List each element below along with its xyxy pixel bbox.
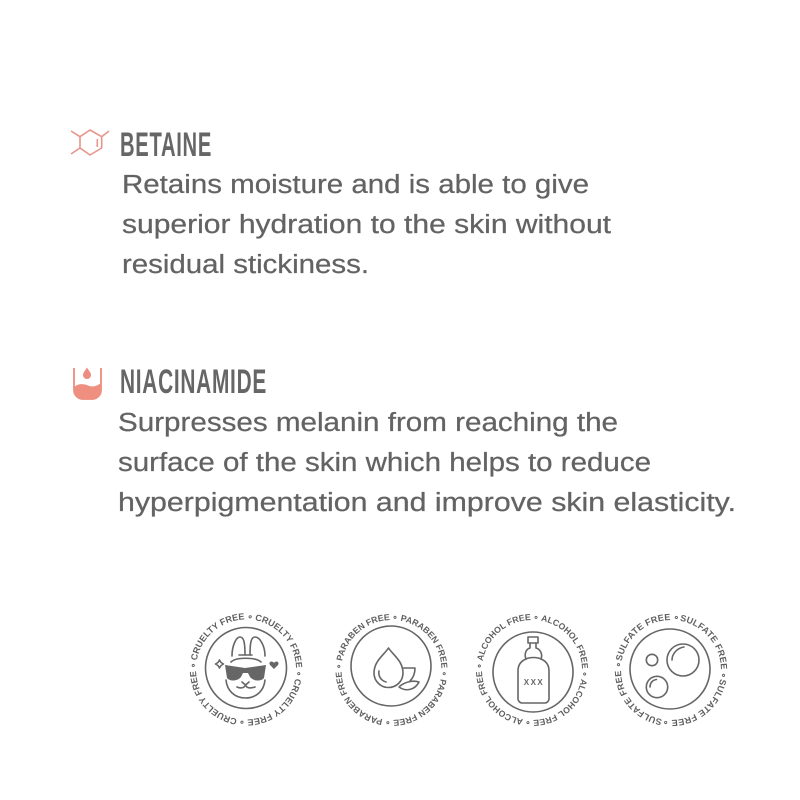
text block: betaine description (122, 171, 611, 279)
badge: paraben free (336, 614, 448, 726)
badge: paraben free: PARABEN FREE ∘ (386, 679, 446, 726)
badge: cruelty free: CRUELTY FREE ∘ (240, 679, 301, 726)
icon: bottle: XXX (524, 678, 544, 687)
text block: betaine description: residual stickiness. (122, 251, 369, 279)
badge: paraben free: PARABEN FREE ∘ (336, 664, 382, 725)
badge: cruelty free: CRUELTY FREE ∘ (256, 614, 302, 676)
heading: betaine: BETAINE (120, 126, 212, 164)
badge: sulfate free: SULFATE FREE ∘ (664, 679, 726, 726)
icon: bubbles (646, 644, 699, 698)
badge: sulfate free: SULFATE FREE ∘ (616, 614, 678, 661)
badge: alcohol free: ALCOHOL FREE ∘ (477, 614, 538, 661)
badge: cruelty free: CRUELTY FREE ∘ (191, 613, 252, 660)
badge: sulfate free: SULFATE FREE ∘ (614, 663, 662, 725)
badge: alcohol free: ALCOHOL FREE ∘ (541, 615, 588, 676)
text block: betaine description: Retains moisture and is able to give (122, 171, 589, 199)
icon: beaker with drop (74, 368, 101, 399)
badge: alcohol free (476, 614, 588, 726)
badge: sulfate free (614, 614, 728, 726)
text block: niacinamide description (118, 409, 736, 517)
text block: niacinamide description: hyperpigmentation and improve skin elasticity. (118, 489, 736, 517)
badge: paraben free: PARABEN FREE ∘ (336, 614, 397, 661)
heading: niacinamide: NIACINAMIDE (120, 363, 267, 401)
text block: niacinamide description: surface of the skin which helps to reduce (118, 449, 651, 477)
badge: sulfate free: SULFATE FREE ∘ (680, 615, 728, 677)
text block: niacinamide description: Surpresses melanin from reaching the (118, 409, 618, 437)
icon: rabbit with sunglasses (216, 637, 279, 698)
badge: cruelty free: CRUELTY FREE ∘ (190, 664, 236, 724)
icon: water drop with leaves (374, 648, 419, 690)
badge: alcohol free: ALCOHOL FREE ∘ (476, 664, 523, 725)
badge: paraben free: PARABEN FREE ∘ (400, 614, 448, 676)
icon: molecule (71, 130, 109, 155)
badge: alcohol free: ALCOHOL FREE ∘ (526, 679, 587, 726)
badge: cruelty free (190, 613, 302, 726)
text block: betaine description: superior hydration to the skin without (122, 211, 611, 239)
